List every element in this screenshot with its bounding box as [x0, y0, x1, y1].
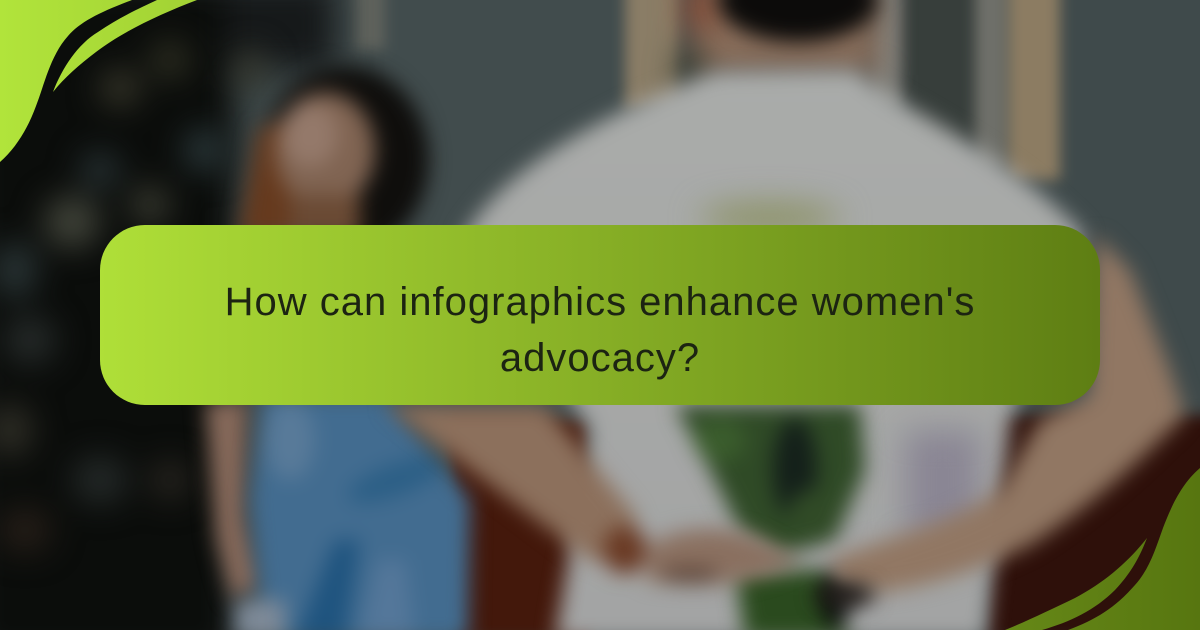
- title banner: [100, 225, 1100, 405]
- man: arms and clasped hands: [385, 235, 1185, 593]
- dark shadow beneath right hand: [815, 583, 875, 607]
- top-left leaf shape: [0, 0, 197, 162]
- flower bouquet: [675, 405, 865, 630]
- bottom-right leaf shape: [1005, 468, 1200, 630]
- red-brown doors behind the figures: [450, 415, 1200, 630]
- foliage highlights: [0, 40, 266, 552]
- man: hair: [718, 0, 878, 42]
- man: neck and ears: [678, 0, 880, 96]
- woman: hair and face: [238, 66, 429, 254]
- woman: blue overalls: [235, 395, 470, 630]
- man: shirt: [462, 70, 1085, 630]
- man: shirt shading: [700, 204, 980, 540]
- woman: arm: [205, 400, 262, 600]
- title: How can infographics enhance women's advocacy?: [225, 280, 975, 380]
- dark foliage wall: [0, 0, 335, 630]
